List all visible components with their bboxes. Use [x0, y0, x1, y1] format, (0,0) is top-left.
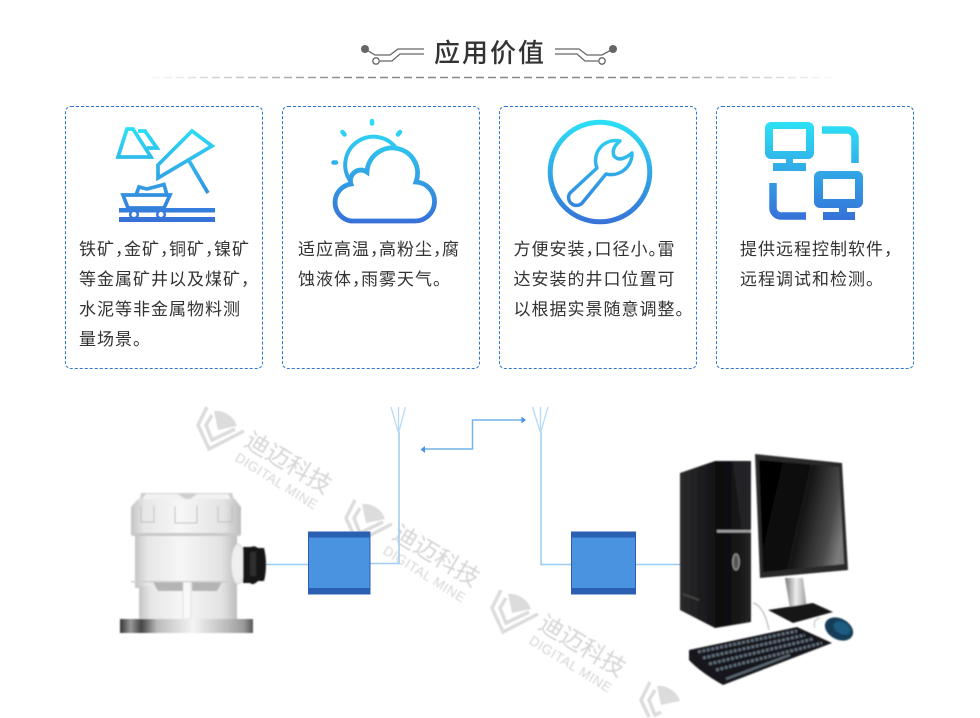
desktop computer: [680, 454, 857, 685]
text: easy installation: 达安装的井口位置可: [514, 270, 676, 289]
text: easy installation: [514, 240, 694, 319]
watermark 1: DIGITAL MINE: [232, 450, 321, 513]
transceiver box left: [308, 532, 370, 594]
computer keyboard: [689, 627, 832, 685]
title circuit ornament right: [555, 45, 617, 65]
watermark 2: DIGITAL MINE: [380, 543, 469, 606]
icon: sun and cloud: [331, 118, 437, 224]
diagram: radar wireless link to computer: [118, 406, 854, 718]
icon: wrench in circle: [548, 120, 652, 224]
left antenna: [391, 407, 406, 433]
right antenna: [532, 407, 548, 433]
computer tower: [680, 461, 751, 628]
panel: harsh environments: [282, 106, 480, 369]
title circuit ornament left: [361, 45, 424, 65]
text: remote control: 远程调试和检测。: [740, 270, 884, 289]
transceiver box right: [572, 532, 636, 594]
watermark 1: 迪迈科技: [240, 427, 336, 500]
icon: networked computers: [765, 122, 863, 220]
panel: mining scenes: [65, 106, 263, 369]
watermark 2: [346, 500, 484, 606]
icon: mining pick and cart: [116, 127, 216, 222]
computer monitor: [755, 454, 848, 623]
text: harsh environments: 适应高温，高粉尘，腐: [298, 240, 460, 259]
text: mining scenes: [79, 240, 259, 349]
watermark 4: [641, 682, 680, 717]
connection lines: [266, 432, 681, 564]
title: 应用价值: [434, 38, 546, 68]
text: mining scenes: 量场景。: [79, 330, 151, 349]
text: harsh environments: 蚀液体，雨雾天气。: [298, 270, 451, 289]
text: easy installation: 方便安装，口径小。雷: [514, 240, 676, 259]
text: mining scenes: 水泥等非金属物料测: [79, 300, 241, 319]
text: mining scenes: 等金属矿井以及煤矿，: [79, 270, 259, 289]
watermark 3: DIGITAL MINE: [526, 633, 615, 696]
panel: remote control: [716, 106, 914, 369]
watermark 1: [198, 407, 336, 513]
text: harsh environments: [298, 240, 460, 289]
text: remote control: 提供远程控制软件，: [740, 240, 902, 259]
arrow: bidirectional wireless signal: [420, 416, 526, 453]
watermark 2: 迪迈科技: [388, 520, 484, 593]
text: remote control: [740, 240, 902, 289]
text: easy installation: 以根据实景随意调整。: [514, 300, 694, 319]
text: mining scenes: 铁矿，金矿，铜矿，镍矿: [79, 240, 250, 259]
radar level sensor: [120, 493, 266, 633]
watermark 3: [492, 590, 630, 696]
watermark 3: 迪迈科技: [534, 610, 630, 683]
panel: easy installation: [499, 106, 697, 369]
computer mouse: [753, 603, 857, 645]
